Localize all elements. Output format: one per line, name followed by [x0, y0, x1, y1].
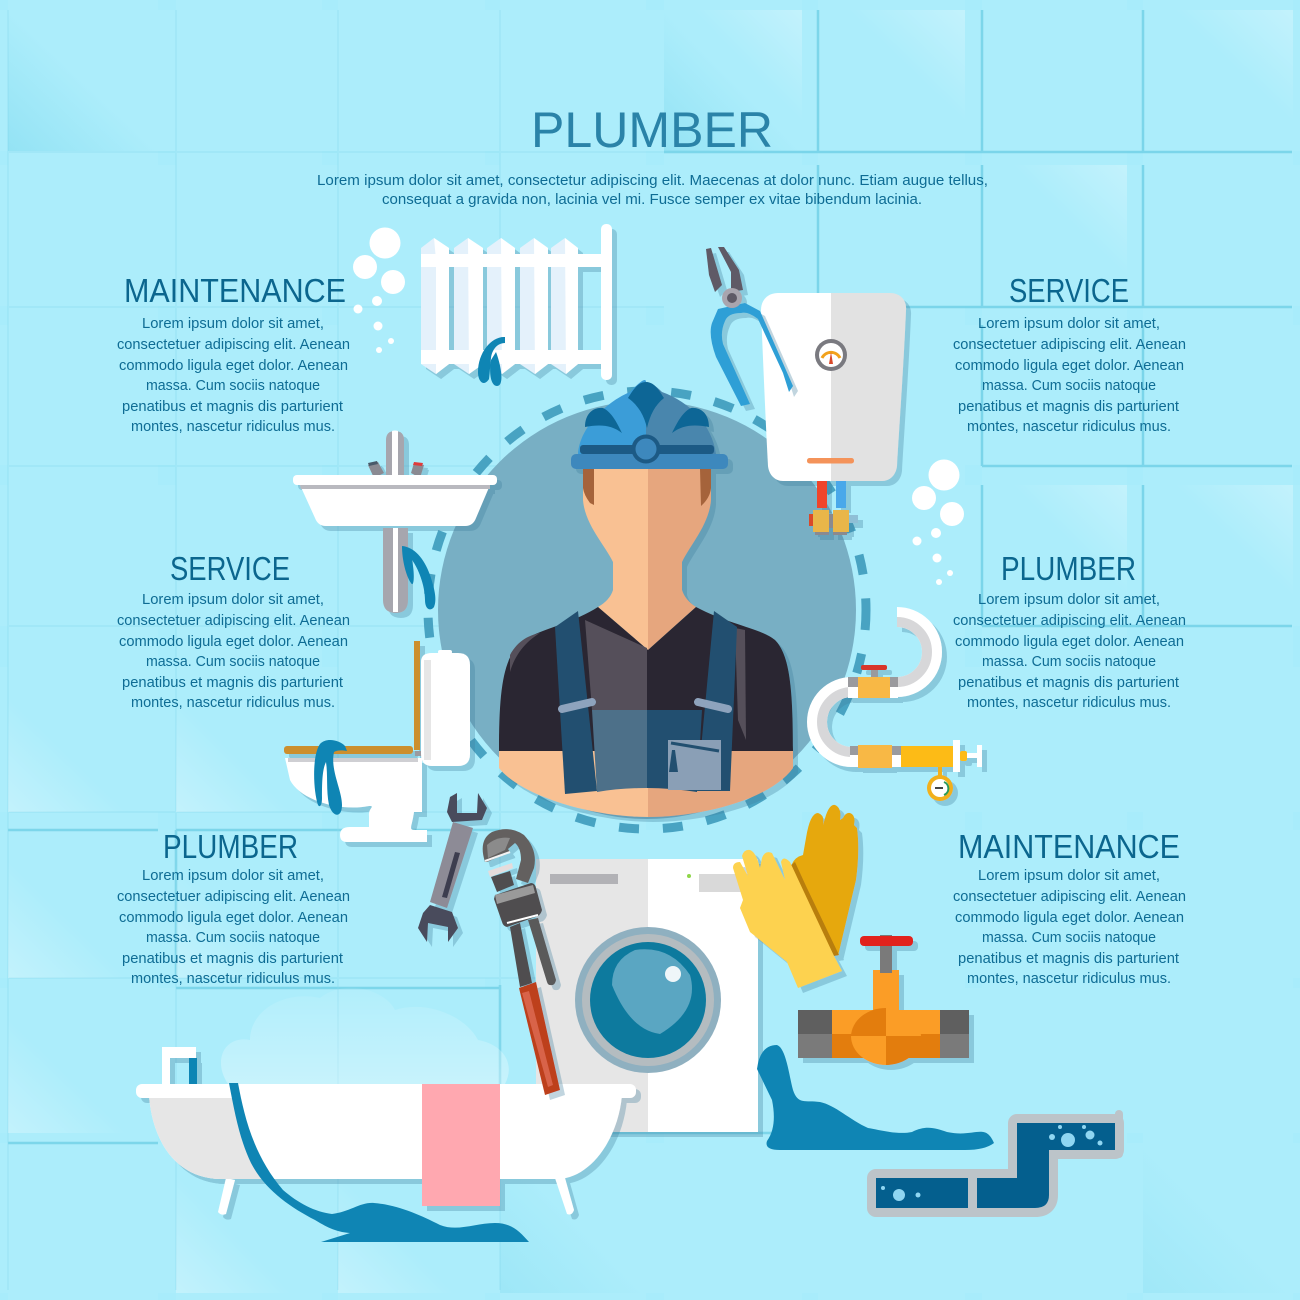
text block: maintenance left: MAINTENANCE	[124, 272, 346, 309]
text block: maintenance left	[117, 272, 350, 435]
text block: plumber right	[953, 550, 1186, 711]
icon: leaking pipe with bubbles	[876, 1110, 1123, 1214]
icon: connected pipes with valve and gauge	[817, 617, 982, 801]
text block: plumber left: massa. Cum sociis natoque	[146, 930, 320, 946]
text block: maintenance right: penatibus et magnis dis parturient	[958, 951, 1179, 967]
icon: gate valve	[798, 935, 969, 1065]
washer door	[575, 927, 721, 1073]
text block: plumber right: commodo ligula eget dolor. Aenean	[955, 634, 1184, 650]
text block: service left: consectetuer adipiscing elit. Aenean	[117, 613, 350, 629]
arms	[499, 750, 793, 817]
intro text	[317, 173, 988, 208]
icon: pipe wrench	[483, 829, 560, 1095]
face and neck	[583, 469, 711, 650]
helmet	[571, 380, 728, 469]
text block: plumber right: PLUMBER	[1001, 550, 1136, 587]
text block: maintenance right: consectetuer adipiscing elit. Aenean	[953, 889, 1186, 905]
icon: radiator	[421, 224, 612, 380]
icon: leak puddle right	[757, 1045, 994, 1150]
icon: water stream from bath	[229, 1083, 529, 1242]
shirt	[499, 607, 793, 751]
text block: service left: Lorem ipsum dolor sit amet,	[142, 592, 324, 608]
plumber figure	[499, 380, 793, 817]
text block: plumber left: PLUMBER	[163, 828, 298, 865]
text block: plumber right: consectetuer adipiscing elit. Aenean	[953, 613, 1186, 629]
icon: open-ended spanner	[418, 793, 487, 942]
icon: soap bubbles left	[353, 228, 405, 353]
central plumber portrait	[428, 380, 866, 829]
text block: plumber right: Lorem ipsum dolor sit amet,	[978, 592, 1160, 608]
icon: toilet	[284, 641, 470, 842]
text block: service right: penatibus et magnis dis parturient	[958, 399, 1179, 415]
icon: radiator water drip	[478, 337, 505, 386]
text block: plumber left: commodo ligula eget dolor. Aenean	[119, 910, 348, 926]
intro text: consequat a gravida non, lacinia vel mi. Fusce semper ex vitae bibendum lacinia.	[382, 192, 922, 208]
text block: maintenance right	[953, 828, 1186, 987]
text block: service right: SERVICE	[1009, 272, 1129, 309]
text block: plumber right: penatibus et magnis dis parturient	[958, 675, 1179, 691]
text block: maintenance left: consectetuer adipiscing elit. Aenean	[117, 337, 350, 353]
text block: service right: consectetuer adipiscing elit. Aenean	[953, 337, 1186, 353]
text block: service right: Lorem ipsum dolor sit amet,	[978, 316, 1160, 332]
text block: service left: massa. Cum sociis natoque	[146, 654, 320, 670]
text block: service left: penatibus et magnis dis parturient	[122, 675, 343, 691]
icon: toilet water drip	[314, 740, 347, 815]
text block: maintenance right: massa. Cum sociis natoque	[982, 930, 1156, 946]
text block: service right: massa. Cum sociis natoque	[982, 378, 1156, 394]
intro text: Lorem ipsum dolor sit amet, consectetur adipiscing elit. Maecenas at dolor nunc. Etiam augue tellus,	[317, 173, 988, 189]
text block: service left	[117, 550, 350, 711]
text block: plumber left: montes, nascetur ridiculus mus.	[131, 971, 335, 987]
title: PLUMBER	[531, 102, 773, 158]
text block: plumber right: montes, nascetur ridiculus mus.	[967, 695, 1171, 711]
text block: service right	[953, 272, 1186, 435]
text block: plumber right: massa. Cum sociis natoque	[982, 654, 1156, 670]
text block: plumber left: consectetuer adipiscing elit. Aenean	[117, 889, 350, 905]
text block: service right: montes, nascetur ridiculus mus.	[967, 419, 1171, 435]
icon: soap bubbles right	[912, 460, 964, 585]
text block: plumber left: Lorem ipsum dolor sit amet,	[142, 868, 324, 884]
text block: maintenance right: Lorem ipsum dolor sit amet,	[978, 868, 1160, 884]
icon: washbasin	[293, 430, 497, 613]
text block: plumber left	[117, 828, 350, 987]
text block: maintenance left: massa. Cum sociis natoque	[146, 378, 320, 394]
icon: pliers	[706, 247, 793, 406]
backdrop circle and dashed ring	[428, 391, 866, 829]
text block: service left: montes, nascetur ridiculus mus.	[131, 695, 335, 711]
icon: rubber gloves	[733, 805, 858, 988]
overalls	[555, 611, 737, 794]
text block: maintenance left: commodo ligula eget dolor. Aenean	[119, 358, 348, 374]
text block: maintenance left: penatibus et magnis dis parturient	[122, 399, 343, 415]
text block: maintenance right: commodo ligula eget dolor. Aenean	[955, 910, 1184, 926]
text block: maintenance left: Lorem ipsum dolor sit amet,	[142, 316, 324, 332]
text block: maintenance right: montes, nascetur ridiculus mus.	[967, 971, 1171, 987]
icon: steam cloud	[221, 988, 509, 1084]
icon: basin water drip	[402, 546, 435, 609]
text block: maintenance right: MAINTENANCE	[958, 828, 1180, 865]
icon: washing machine	[536, 859, 758, 1132]
text block: service right: commodo ligula eget dolor. Aenean	[955, 358, 1184, 374]
icon: water heater	[761, 293, 906, 535]
text block: maintenance left: montes, nascetur ridiculus mus.	[131, 419, 335, 435]
text block: plumber left: penatibus et magnis dis parturient	[122, 951, 343, 967]
text block: service left: SERVICE	[170, 550, 290, 587]
icon: bathtub	[136, 1047, 636, 1215]
text block: service left: commodo ligula eget dolor. Aenean	[119, 634, 348, 650]
